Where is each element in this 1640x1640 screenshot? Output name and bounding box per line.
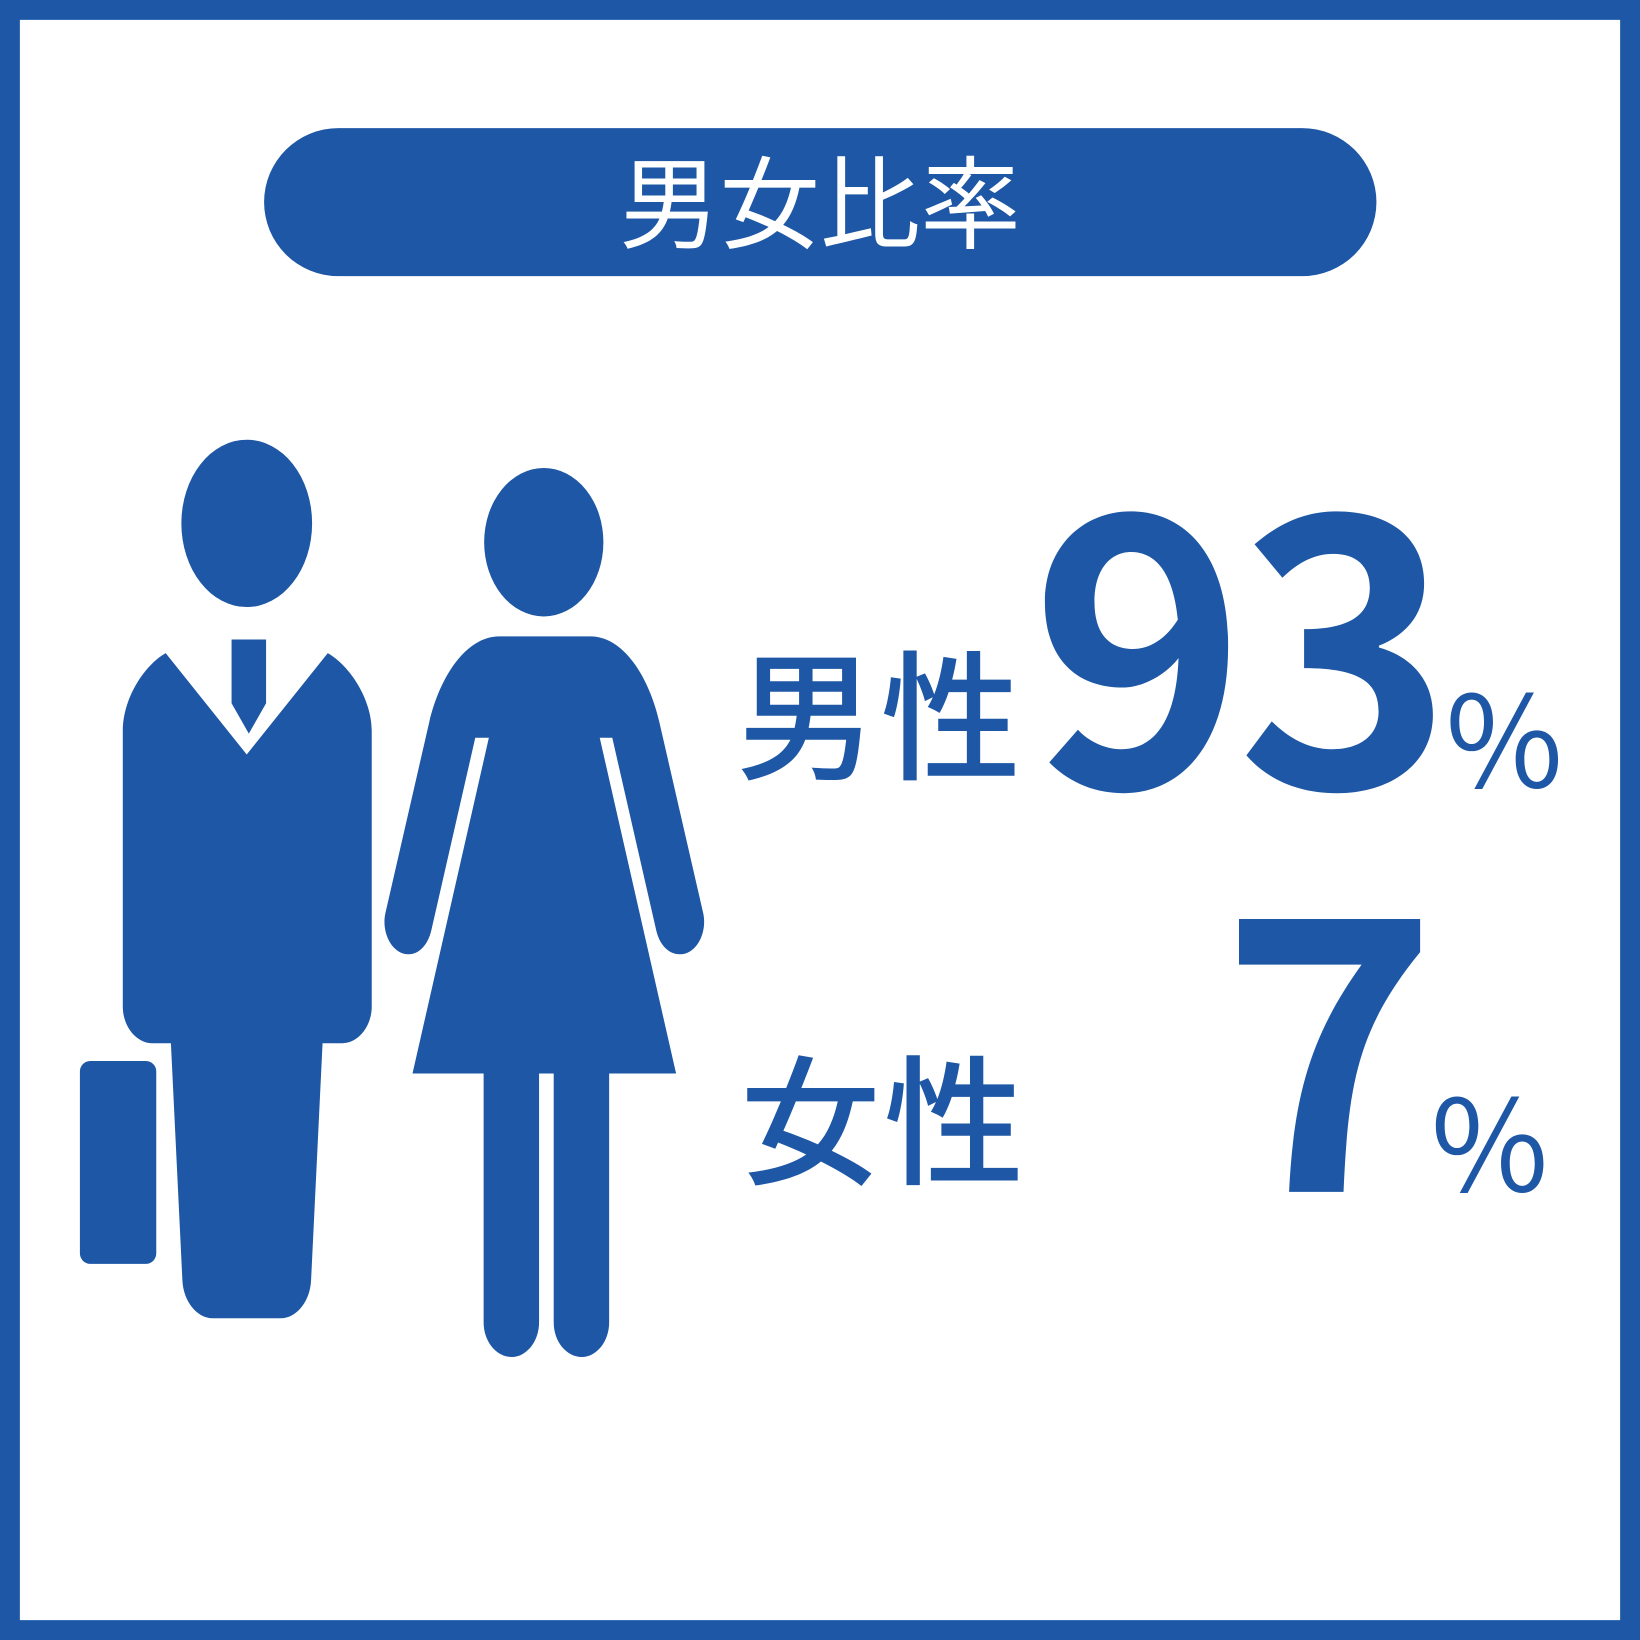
unit: male percent: % [1445,640,1563,825]
label: male: 男性 [736,607,1021,810]
value: male 93: 93 [1030,362,1444,894]
icon: businessman with briefcase [80,440,372,1318]
value: female 7: 7 [1221,766,1438,1299]
title text: 男女比率 [619,125,1021,270]
icon: woman [384,468,704,1357]
title banner [264,125,1376,276]
label: female: 女性 [741,1012,1024,1215]
unit: female percent: % [1431,1043,1548,1228]
